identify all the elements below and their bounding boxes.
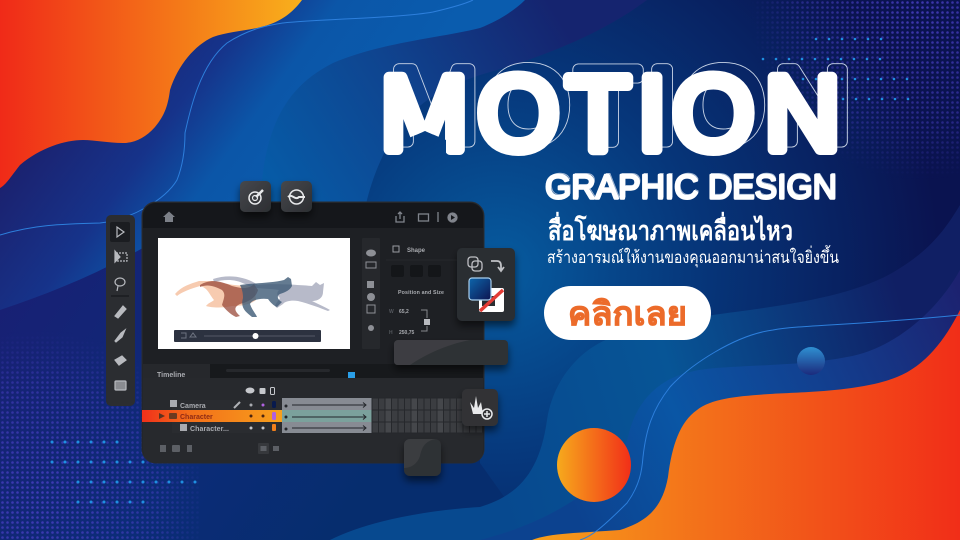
orange wave bottom right bbox=[532, 310, 960, 540]
timeline visibility headers bbox=[246, 388, 274, 394]
halftone dots lower left bbox=[1, 342, 198, 539]
frame grid bbox=[372, 398, 483, 433]
shape heading: Shape bbox=[407, 248, 426, 254]
empty floating bar bbox=[394, 340, 508, 365]
dark cat bbox=[240, 277, 292, 317]
subtitle outline: GRAPHIC DESIGN bbox=[546, 167, 838, 205]
property panel: 65,2 bbox=[399, 309, 409, 315]
halftone dots upper right bbox=[762, 1, 959, 168]
title: MOTION: M bbox=[380, 56, 468, 172]
timeline tab: Timeline bbox=[157, 372, 185, 379]
preview canvas bbox=[158, 238, 350, 349]
timeline rows bbox=[142, 400, 282, 433]
row: character selected: Character bbox=[180, 414, 213, 421]
red cat bbox=[200, 281, 258, 317]
property panel: H bbox=[389, 330, 393, 336]
playback bar bbox=[174, 330, 321, 342]
selected tool bbox=[110, 222, 130, 242]
orange circle bbox=[557, 428, 631, 502]
left toolbar bbox=[106, 215, 135, 406]
title: MOTION outline: T bbox=[576, 48, 640, 164]
tool icons bbox=[111, 227, 129, 390]
title: MOTION outline: O bbox=[488, 48, 569, 164]
software window bbox=[142, 202, 484, 463]
colour panel bbox=[457, 248, 515, 321]
bright dot rows lower left bbox=[52, 442, 200, 502]
align buttons bbox=[391, 265, 441, 277]
Thai headline: สื่อโฆษณาภาพเคลื่อนไหว bbox=[548, 211, 793, 246]
thin curve top bbox=[0, 0, 473, 235]
title: MOTION outline: O bbox=[682, 48, 764, 164]
title: MOTION outline: N bbox=[774, 48, 850, 164]
size values: W bbox=[389, 309, 394, 315]
title: MOTION outline: M bbox=[390, 48, 478, 164]
title: MOTION outline bbox=[393, 62, 848, 148]
timeline tab bbox=[143, 364, 355, 379]
button label: คลิกเลย bbox=[568, 295, 687, 332]
property panel: 250,75 bbox=[399, 330, 415, 336]
title: MOTION outline: I bbox=[648, 48, 677, 164]
bright dot rows upper right bbox=[763, 39, 912, 99]
Thai subhead: สร้างอารมณ์ให้งานของคุณออกมาน่าสนใจยิ่งขึ้น bbox=[547, 245, 839, 268]
subtitle: GRAPHIC DESIGN: GRAPHIC DESIGN bbox=[545, 168, 837, 206]
button: add tool bbox=[462, 389, 498, 426]
grey cat bbox=[213, 276, 330, 311]
property panel bbox=[386, 246, 483, 336]
bottom floating button bbox=[404, 439, 441, 476]
call to action button bbox=[544, 286, 711, 340]
title: MOTION: N bbox=[764, 56, 840, 172]
keyframe tracks bbox=[282, 398, 372, 433]
row: character sublayer: Character... bbox=[190, 426, 229, 433]
button: target tool bbox=[240, 181, 271, 212]
icon: layers bbox=[468, 257, 482, 271]
cat animation silhouettes bbox=[175, 276, 330, 317]
stroke swatch bbox=[479, 288, 504, 312]
fill swatch bbox=[469, 278, 491, 300]
header icons bbox=[396, 212, 457, 222]
icon: home bbox=[163, 212, 175, 222]
icon: swap arrow bbox=[491, 261, 504, 271]
row: camera: Camera bbox=[180, 403, 206, 410]
title: MOTION bbox=[384, 70, 838, 156]
window frame bbox=[142, 202, 484, 463]
button: curve tool bbox=[281, 181, 312, 212]
position heading: Position and Size bbox=[398, 290, 444, 296]
title: MOTION: O bbox=[478, 56, 559, 172]
blue ball bbox=[797, 347, 825, 375]
title: MOTION: T bbox=[566, 56, 630, 172]
timeline footer icons bbox=[160, 443, 279, 454]
orange wave top left bbox=[0, 0, 302, 188]
title: MOTION: I bbox=[638, 56, 667, 172]
tool strip bbox=[362, 238, 380, 349]
peach cat bbox=[175, 281, 256, 308]
title: MOTION: O bbox=[672, 56, 754, 172]
thin curve bottom bbox=[580, 315, 960, 540]
